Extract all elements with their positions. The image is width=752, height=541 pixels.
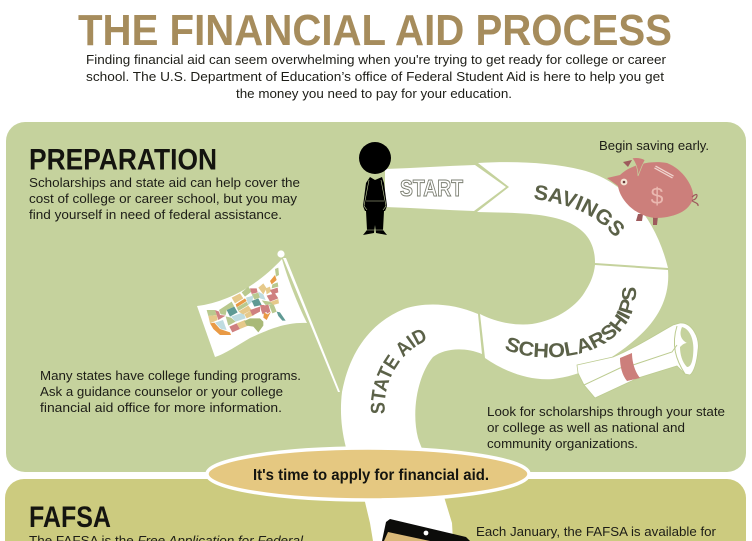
text: scholarships: or college as well as national and xyxy=(487,421,685,435)
us map xyxy=(207,268,286,335)
start label: START xyxy=(400,175,463,201)
text: preparation xyxy=(29,176,300,222)
panel: preparation xyxy=(6,122,746,472)
text: preparation: Scholarships and state aid can help cover the xyxy=(29,176,300,190)
text: scholarships: Look for scholarships through your state xyxy=(487,405,725,419)
icon: tablet xyxy=(382,519,470,541)
text: begin saving: Begin saving early. xyxy=(599,139,709,153)
text: scholarships xyxy=(487,405,725,451)
panel: fafsa xyxy=(5,479,746,541)
icon: piggy bank: $ xyxy=(651,183,664,209)
road: savings segment xyxy=(477,162,668,268)
icon: person xyxy=(359,142,391,235)
flag cloth xyxy=(197,259,307,357)
title: THE FINANCIAL AID PROCESS xyxy=(78,6,672,55)
heading: fafsa: FAFSA xyxy=(29,501,111,534)
text: state aid: Many states have college funding programs. xyxy=(40,369,301,383)
icon: diploma scroll xyxy=(577,323,698,398)
callout: apply for aid: It's time to apply for financial aid. xyxy=(253,467,489,484)
text: state aid: financial aid office for more information. xyxy=(40,401,282,415)
text: state aid xyxy=(40,370,300,412)
intro text xyxy=(86,53,666,101)
intro text: Finding financial aid can seem overwhelming when you're trying to get ready for college or career xyxy=(86,53,666,67)
text: state aid: Ask a guidance counselor or your college xyxy=(40,385,283,399)
flag pole xyxy=(283,258,340,392)
text: preparation: find yourself in need of federal assistance. xyxy=(29,208,282,222)
text: fafsa january: Each January, the FAFSA is available for xyxy=(476,525,716,539)
scroll opening xyxy=(680,327,693,367)
icon: piggy bank xyxy=(607,158,698,225)
text: scholarships: community organizations. xyxy=(487,437,638,451)
text: preparation: cost of college or career school, but you may xyxy=(29,192,298,206)
heading: preparation: PREPARATION xyxy=(29,144,217,176)
intro text: school. The U.S. Department of Education’s office of Federal Student Aid is here to help you get xyxy=(86,70,665,84)
road: state aid segment xyxy=(341,305,482,541)
road label: savings: SAVINGS xyxy=(534,185,624,236)
intro text: the money you need to pay for your education. xyxy=(236,87,512,101)
callout: apply for aid xyxy=(207,448,529,500)
scroll band xyxy=(620,353,640,381)
icon: flag with map xyxy=(197,250,340,392)
road label: scholarships: SCHOLARSHIPS xyxy=(506,288,636,358)
road: start arrow xyxy=(385,165,506,211)
road label: state aid: STATE AID xyxy=(370,330,426,414)
road: scholarships segment xyxy=(480,265,668,379)
